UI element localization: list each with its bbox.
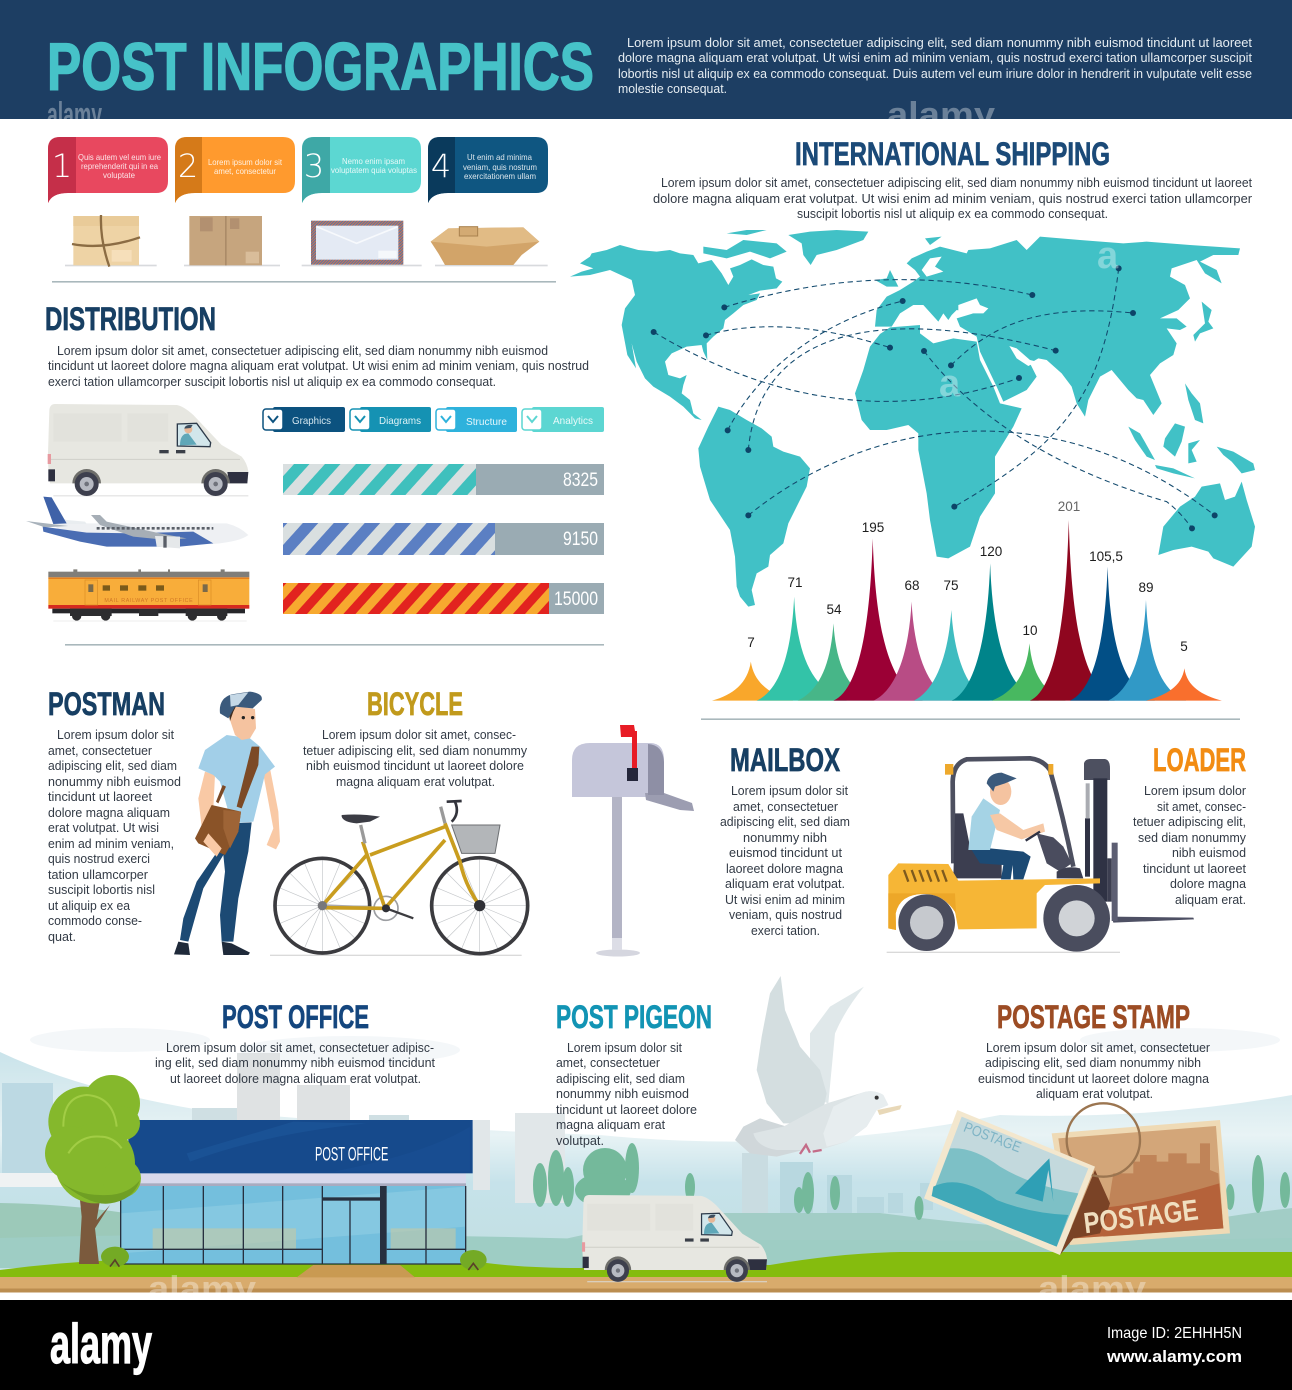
icon: tree and shrubs — [45, 1075, 487, 1270]
postage stamp text: euismod tincidunt ut laoreet dolore magna — [978, 1071, 1210, 1086]
green hills — [0, 1203, 250, 1262]
bicycle text — [303, 727, 527, 789]
shipping text: suscipit lobortis nisl ut aliquip ex ea commodo consequat. — [797, 206, 1108, 221]
heading: mailbox: MAILBOX — [730, 742, 840, 778]
loader text: dolore magna — [1170, 876, 1247, 891]
section: bicycle — [270, 686, 528, 956]
distribution text: Lorem ipsum dolor sit amet, consectetuer adipiscing elit, sed diam nonummy nibh euismod — [57, 343, 548, 358]
pale band — [0, 1173, 122, 1187]
tabs: graphics, diagrams, structure, analytics — [263, 407, 604, 432]
shipping routes — [654, 268, 1215, 528]
mailbox text: nonummy nibh — [743, 830, 827, 845]
tab: diagrams — [350, 407, 431, 432]
shipping text: dolore magna aliquam erat volutpat. Ut wisi enim ad minim veniam, quis nostrud exerci tation ullamcorper — [653, 191, 1253, 206]
world map — [570, 230, 1255, 607]
loader text: nibh euismod — [1172, 845, 1246, 860]
peak values: 105,5 — [1089, 549, 1123, 564]
peak values: 10 — [1022, 623, 1038, 638]
shipping text: Lorem ipsum dolor sit amet, consectetuer adipiscing elit, sed diam nonummy nibh euismod tincidunt ut laoreet — [661, 175, 1252, 190]
icon: brown stamp: POSTAGE — [1082, 1194, 1200, 1240]
callout 2 — [175, 137, 295, 203]
heading: loader: LOADER — [1153, 742, 1246, 778]
header intro text: molestie consequat. — [618, 81, 727, 96]
post pigeon text — [556, 1040, 697, 1148]
bar: 9150 — [283, 523, 604, 555]
peak values: 195 — [862, 520, 884, 535]
callout 3 — [302, 137, 421, 203]
postman text: commodo conse- — [48, 913, 142, 928]
bicycle text: nibh euismod tincidunt ut laoreet dolore — [306, 758, 524, 773]
callout 3: voluptatem quia voluptas — [331, 165, 417, 175]
peak values — [747, 499, 1188, 654]
callout 1: 1 — [52, 147, 72, 185]
icon: mail railway car — [48, 569, 249, 621]
icon: blue stamp: POSTAGE — [961, 1120, 1023, 1156]
header intro text — [618, 35, 1252, 96]
header intro text: dolore magna aliquam erat volutpat. Ut wisi enim ad minim veniam, quis nostrud exerci tation ullamcorper suscipit — [618, 50, 1252, 65]
footer bar — [0, 1300, 1292, 1390]
callout 3: Nemo enim ipsam — [342, 156, 405, 166]
loader text: sed diam nonummy — [1138, 830, 1246, 845]
callout 1: Quis autem vel eum iure — [78, 152, 161, 162]
icon: pigeon — [735, 976, 902, 1157]
background trees — [533, 1143, 1290, 1220]
callout 2: amet, consectetur — [214, 166, 276, 176]
bar: 15000 — [283, 583, 604, 614]
tab: analytics — [522, 407, 604, 432]
heading: post office: POST OFFICE — [222, 999, 369, 1035]
post pigeon text: magna aliquam erat — [556, 1117, 665, 1132]
callout 4: exercitationem ullam — [464, 171, 536, 181]
icon: postman figure — [174, 692, 280, 955]
icon: airmail envelope — [302, 221, 422, 266]
divider — [65, 644, 604, 646]
loader text: tincidunt ut laoreet — [1143, 861, 1246, 876]
section: postage stamp — [924, 999, 1230, 1255]
mailbox text: euismod tincidunt ut — [729, 845, 842, 860]
mailbox text: amet, consectetuer — [733, 799, 839, 814]
postman text: quat. — [48, 929, 76, 944]
continents: old world — [855, 237, 1255, 567]
icon: bicycle — [270, 801, 528, 956]
post pigeon text: adipiscing elit, sed diam — [556, 1071, 685, 1086]
watermarks: alamy — [148, 1270, 256, 1308]
watermarks: a — [939, 363, 961, 405]
loader text: Lorem ipsum dolor — [1144, 783, 1247, 798]
header intro text: lobortis nisl ut aliquip ex ea commodo consequat. Duis autem vel eum iriure dolor in hendrerit in vulputate velit esse — [618, 66, 1252, 81]
icon: post office building — [121, 1120, 473, 1277]
icon: padded pouch — [431, 227, 548, 266]
loader text: aliquam erat. — [1175, 892, 1246, 907]
mailbox text: laoreet dolore magna — [726, 861, 844, 876]
postage stamp text: Lorem ipsum dolor sit amet, consectetuer — [986, 1040, 1211, 1055]
image id: Image ID: 2EHHH5N — [1107, 1325, 1242, 1342]
callout 3: 3 — [304, 147, 324, 185]
header band — [0, 0, 1292, 119]
postman text: amet, consectetuer — [48, 743, 153, 758]
section: loader — [887, 742, 1247, 953]
icon: delivery van — [48, 404, 248, 496]
tab: diagrams: Diagrams — [379, 415, 421, 427]
loader text: sit amet, consec- — [1157, 799, 1246, 814]
callout 1: reprehenderit qui in ea — [81, 161, 158, 171]
peak values: 7 — [747, 635, 755, 650]
inland seas — [922, 257, 1037, 366]
tab: graphics — [263, 407, 345, 432]
mailbox text: adipiscing elit, sed diam — [720, 814, 850, 829]
bar: 9150: 9150 — [563, 529, 598, 550]
divider — [701, 718, 1240, 720]
bar: 15000: 15000 — [554, 589, 598, 610]
bar chart: striped bars — [283, 464, 604, 614]
tab: analytics: Analytics — [553, 415, 593, 427]
postman text: nonummy nibh euismod — [48, 774, 181, 789]
postman text: ut aliquip ex ea — [48, 898, 131, 913]
watermarks: a — [1097, 235, 1119, 277]
section: post office — [155, 999, 435, 1086]
icon: wrapped parcel — [65, 215, 157, 267]
loader text: tetuer adipiscing elit, — [1133, 814, 1246, 829]
watermarks: alamy — [47, 96, 102, 134]
peak values: 75 — [943, 578, 959, 593]
post office text: ut laoreet dolore magna aliquam erat volutpat. — [170, 1071, 421, 1086]
post pigeon text: Lorem ipsum dolor sit — [567, 1040, 682, 1055]
route dots — [651, 265, 1218, 531]
peak values: 54 — [826, 602, 842, 617]
callout 1: voluptate — [103, 170, 135, 180]
peak values: 68 — [904, 578, 920, 593]
icon: mailbox — [572, 725, 694, 956]
bicycle text: Lorem ipsum dolor sit amet, consec- — [322, 727, 516, 742]
heading: international shipping: INTERNATIONAL SHIPPING — [795, 136, 1110, 172]
tab: graphics: Graphics — [292, 415, 331, 427]
continents: americas and greenland — [570, 230, 898, 607]
bar: 8325: 8325 — [563, 470, 598, 491]
footer url: www.alamy.com — [1106, 1347, 1242, 1366]
postage stamp text: adipiscing elit, sed diam nonummy nibh — [985, 1055, 1201, 1070]
post pigeon text: tincidunt ut laoreet dolore — [556, 1102, 697, 1117]
peak values: 120 — [980, 544, 1002, 559]
header intro text: Lorem ipsum dolor sit amet, consectetuer adipiscing elit, sed diam nonummy nibh euismod tincidunt ut laoreet — [627, 35, 1252, 50]
callout 2: 2 — [178, 147, 198, 185]
grass — [0, 1252, 1292, 1278]
mailbox text — [720, 783, 850, 938]
callout 4: 4 — [431, 147, 451, 185]
postman text: erat volutpat. Ut wisi — [48, 820, 159, 835]
heading: distribution: DISTRIBUTION — [45, 301, 216, 337]
post office text — [155, 1040, 435, 1086]
bar: 8325 — [283, 464, 604, 495]
mailbox text: veniam, quis nostrud — [729, 907, 842, 922]
divider — [52, 281, 556, 283]
icon: airplane — [26, 497, 248, 548]
shipping text — [653, 175, 1253, 221]
icon: road van — [582, 1195, 767, 1282]
heading: bicycle: BICYCLE — [367, 686, 463, 722]
road — [0, 1277, 1292, 1292]
landscape background — [0, 1028, 1292, 1292]
section: postman — [48, 686, 280, 955]
heading: postage stamp: POSTAGE STAMP — [997, 999, 1190, 1035]
post office text: Lorem ipsum dolor sit amet, consectetuer adipisc- — [166, 1040, 434, 1055]
peak values: 5 — [1180, 639, 1188, 654]
postage stamp text: aliquam erat volutpat. — [1036, 1086, 1153, 1101]
heading: postman: POSTMAN — [48, 686, 165, 722]
peak values: 71 — [787, 575, 803, 590]
panel: parcels row — [65, 215, 548, 267]
panel: numbered callouts — [48, 137, 548, 203]
distribution text: tincidunt ut laoreet dolore magna aliquam erat volutpat. Ut wisi enim ad minim veniam, quis nostrud — [48, 358, 589, 373]
footer logo: alamy — [50, 1312, 152, 1375]
icon: brown stamp — [1052, 1103, 1230, 1255]
tab: structure: Structure — [466, 416, 507, 428]
title: POST INFOGRAPHICS — [47, 30, 594, 104]
watermarks: alamy — [1038, 1270, 1146, 1308]
postman text: adipiscing elit, sed diam — [48, 758, 177, 773]
postman text: suscipit lobortis nisl — [48, 882, 155, 897]
bicycle text: magna aliquam erat volutpat. — [336, 774, 495, 789]
post pigeon text: volutpat. — [556, 1133, 604, 1148]
section: mailbox — [720, 742, 850, 938]
section: post pigeon — [556, 976, 902, 1157]
callout 1 — [48, 137, 168, 203]
loader text — [1133, 783, 1247, 907]
watermarks — [47, 96, 1146, 1308]
distant hills — [0, 1052, 1292, 1270]
postman text — [48, 727, 181, 944]
mailbox text: Lorem ipsum dolor sit — [731, 783, 848, 798]
icon: cardboard box — [184, 216, 280, 266]
peaks — [712, 520, 1222, 701]
peak values: 201 — [1058, 499, 1080, 514]
icon: blue stamp — [924, 1110, 1095, 1255]
postman text: Lorem ipsum dolor sit — [57, 727, 174, 742]
post pigeon text: nonummy nibh euismod — [556, 1086, 689, 1101]
mailbox text: Ut wisi enim ad minim — [725, 892, 845, 907]
peak chart — [712, 499, 1222, 701]
postman text: quis nostrud exerci — [48, 851, 150, 866]
mailbox text: aliquam erat volutpat. — [725, 876, 845, 891]
heading: post pigeon: POST PIGEON — [556, 999, 712, 1035]
city skyline — [2, 1053, 933, 1215]
sign: post office: POST OFFICE — [315, 1145, 388, 1166]
post pigeon text: amet, consectetuer — [556, 1055, 661, 1070]
peak values: 89 — [1138, 580, 1154, 595]
section: international shipping — [570, 136, 1255, 701]
section: distribution — [26, 301, 604, 621]
clouds — [30, 1028, 1280, 1064]
callout 4 — [428, 137, 548, 203]
callout 4: veniam, quis nostrum — [463, 162, 537, 172]
postman text: enim ad minim veniam, — [48, 836, 174, 851]
postage stamp text — [978, 1040, 1211, 1101]
postman text: tation ullamcorper — [48, 867, 149, 882]
post office text: ing elit, sed diam nonummy nibh euismod tincidunt — [155, 1055, 435, 1070]
distribution text — [48, 343, 589, 389]
tab: structure — [436, 407, 517, 432]
mailbox text: exerci tation. — [751, 923, 820, 938]
watermarks: alamy — [887, 96, 995, 134]
postman text: dolore magna aliquam — [48, 805, 170, 820]
distribution text: exerci tation ullamcorper suscipit lobortis nisl ut aliquip ex ea commodo consequat. — [48, 374, 496, 389]
icon: forklift — [887, 758, 1194, 953]
postman text: tincidunt ut laoreet — [48, 789, 152, 804]
callout 4: Ut enim ad minima — [467, 152, 532, 162]
bicycle text: tetuer adipiscing elit, sed diam nonummy — [303, 743, 527, 758]
callout 2: Lorem ipsum dolor sit — [208, 157, 283, 167]
icon: mail railway car: MAIL RAILWAY POST OFFICE — [104, 598, 193, 604]
